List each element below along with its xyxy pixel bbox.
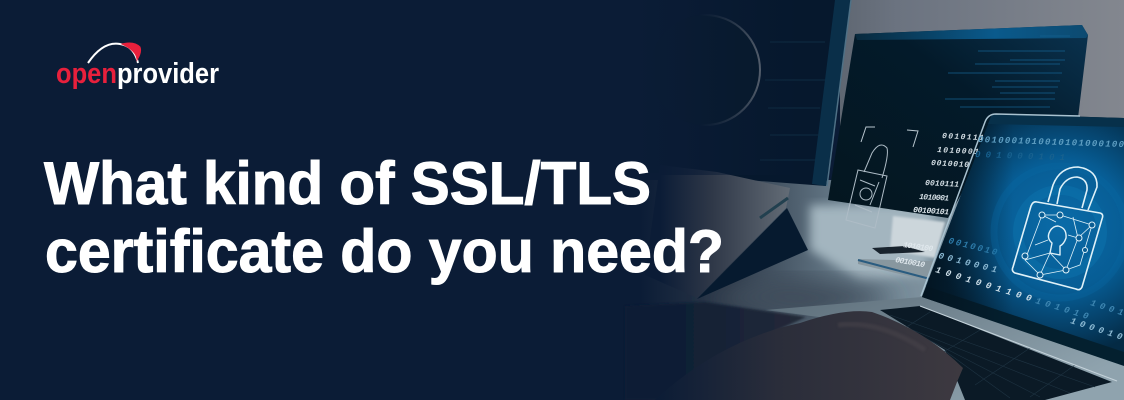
logo: openprovider [56,43,219,90]
binary text on laptop [934,135,1124,343]
title: What kind of SSL/TLS [44,150,651,217]
binary text on laptop: 100010 [1069,316,1124,343]
hands [625,302,963,400]
laptop screen [922,114,1124,366]
desk [640,180,1124,400]
left fade overlay [630,0,800,175]
title [44,150,724,285]
background laptop and floor reflections [858,206,965,280]
binary text on laptop: 001000101 [975,150,1065,163]
title: certificate do you need? [45,218,724,285]
second monitor [828,25,1088,228]
binary text on laptop: 1001 [1089,298,1124,318]
left monitor with lens reflection [640,0,851,186]
icon: logo arc [88,43,141,63]
keyboard [880,306,1112,400]
icon: glowing padlock [994,166,1124,298]
main laptop [765,114,1124,400]
binary text on laptop: 0010010 [947,236,999,258]
laptop deck [765,297,1124,400]
binary text on laptop: 1001001100 [934,265,1033,304]
wall [840,0,1124,180]
binary text [919,132,990,204]
binary text on laptop: 0010001 [937,251,998,275]
binary text: 0010010 [931,159,969,170]
background laptop and floor reflections: 00100101 [913,206,950,218]
binary text: 0010111 [925,179,959,190]
binary text: 00101110 [942,132,990,144]
background laptop and floor reflections: 0010010 [894,256,926,270]
focus brackets [861,127,918,147]
binary text on laptop: 101010 [1034,296,1090,322]
binary text: 1010001 [919,193,949,204]
wordmark: openprovider [56,58,219,90]
binary text: 10100010 [937,146,985,158]
tablet [645,165,808,299]
background laptop and floor reflections: 1010100 [903,241,934,254]
icon: small padlock [846,145,887,228]
binary text on laptop: 0010001010010101000100 [978,135,1124,150]
photo: desk scene [625,0,1124,400]
